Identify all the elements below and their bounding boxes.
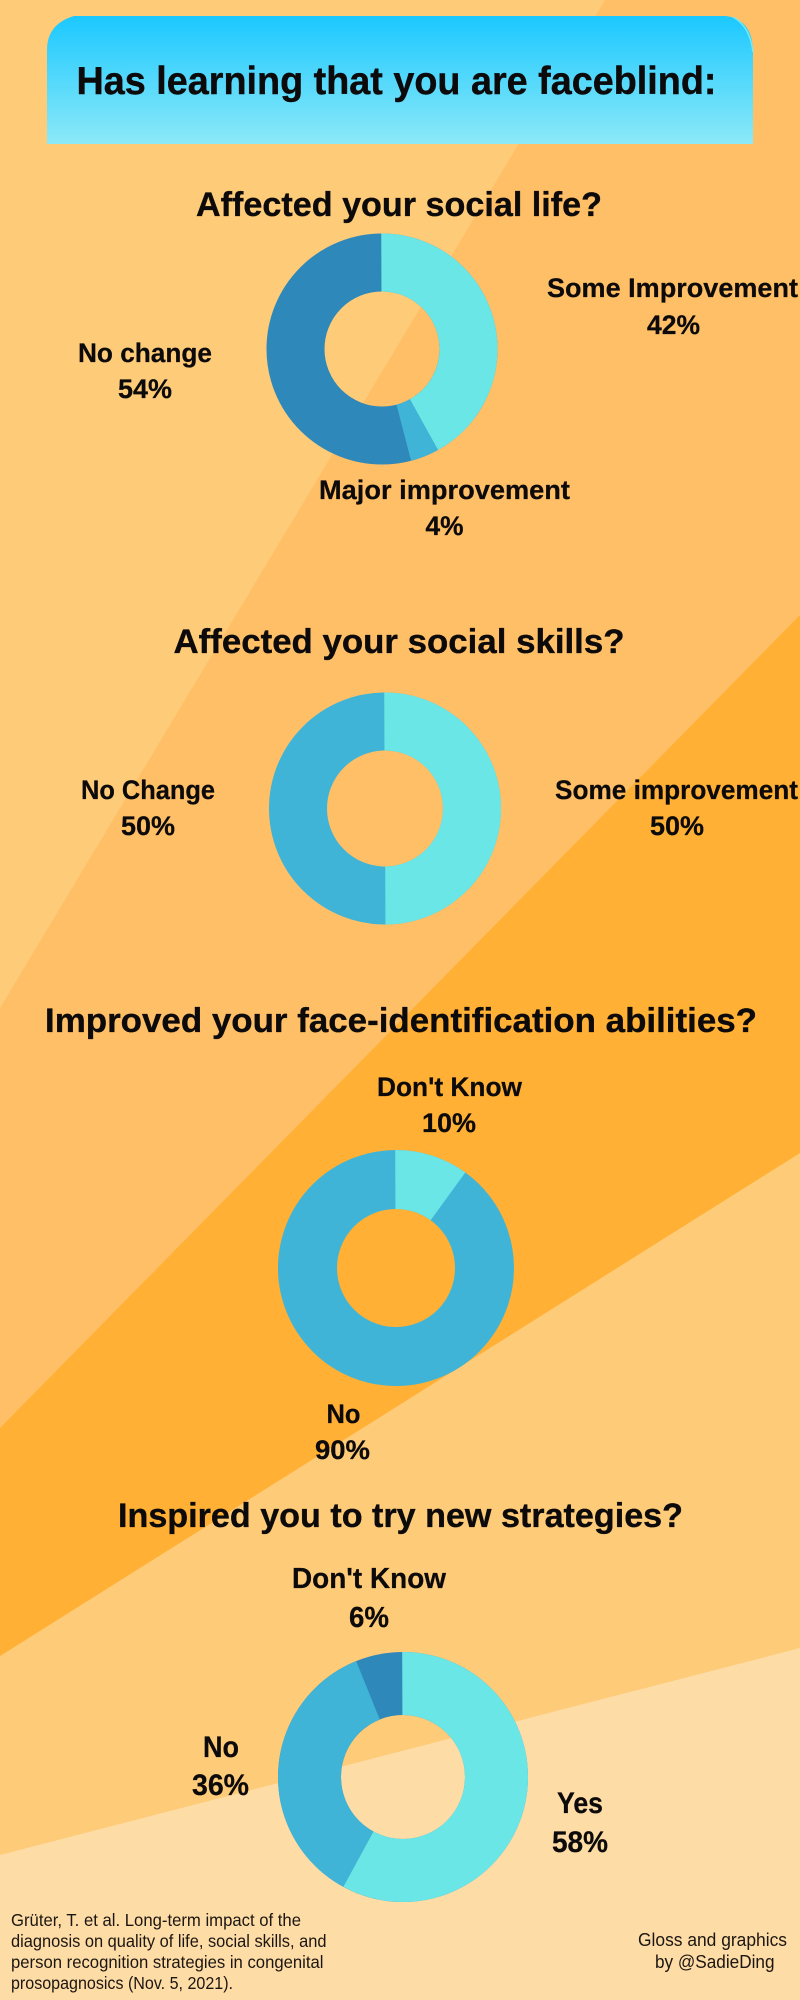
label: no 90%: [315, 1399, 370, 1465]
label: don't know 10%: 10%: [422, 1108, 476, 1138]
citation text: diagnosis on quality of life, social skills, and: [11, 1931, 326, 1951]
credit text: [638, 1929, 787, 1972]
citation text: person recognition strategies in congenital: [11, 1952, 324, 1972]
label: no change 54%: No change: [78, 338, 212, 368]
title text: Has learning that you are faceblind:: [76, 60, 716, 103]
label: some improvement 42%: Some Improvement: [547, 273, 798, 303]
label: don't know 6%: 6%: [349, 1602, 389, 1634]
label: no change 54%: 54%: [118, 374, 172, 404]
label: no change 50%: [81, 775, 215, 841]
label: no 36%: [192, 1731, 249, 1802]
label: no 36%: No: [203, 1731, 239, 1764]
label: yes 58%: Yes: [557, 1787, 603, 1820]
heading: face identification: Improved your face-identification abilities?: [45, 1002, 757, 1040]
label: major improvement 4%: Major improvement: [319, 475, 570, 505]
donut chart: new strategies: [310, 1684, 496, 1870]
heading: social skills: Affected your social skills?: [174, 623, 624, 661]
label: no change 50%: 50%: [121, 811, 175, 841]
heading: new strategies: Inspired you to try new strategies?: [118, 1497, 683, 1535]
label: don't know 10%: [377, 1072, 523, 1138]
label: no 90%: 90%: [315, 1435, 370, 1465]
label: major improvement 4%: [319, 475, 570, 541]
panel: social skills: [81, 623, 798, 896]
label: some improvement 50%: [555, 775, 798, 841]
panel: social life: [78, 186, 798, 541]
credit text: by @SadieDing: [655, 1951, 774, 1972]
label: no 90%: No: [326, 1399, 360, 1429]
panel: new strategies: [118, 1497, 683, 1870]
label: no change 54%: [78, 338, 212, 404]
label: don't know 6%: Don't Know: [292, 1563, 446, 1595]
label: major improvement 4%: 4%: [426, 511, 464, 541]
credit text: Gloss and graphics: [638, 1929, 787, 1950]
panel: face identification: [45, 1002, 757, 1465]
label: yes 58%: 58%: [552, 1826, 608, 1859]
label: no change 50%: No Change: [81, 775, 215, 805]
heading: social life: Affected your social life?: [196, 186, 602, 224]
label: some improvement 42%: 42%: [647, 310, 700, 340]
donut chart: social life: [296, 262, 468, 436]
donut chart: social skills: [298, 722, 472, 896]
citation text: prosopagnosics (Nov. 5, 2021).: [11, 1973, 233, 1993]
citation text: Grüter, T. et al. Long-term impact of the: [11, 1910, 301, 1930]
label: no 36%: 36%: [192, 1769, 249, 1802]
label: some improvement 50%: 50%: [650, 811, 704, 841]
title banner: [47, 16, 753, 144]
label: don't know 6%: [292, 1563, 446, 1634]
label: some improvement 42%: [547, 273, 798, 340]
donut chart: face identification: [308, 1180, 484, 1356]
label: don't know 10%: Don't Know: [377, 1072, 523, 1102]
citation text: [11, 1910, 326, 1993]
label: some improvement 50%: Some improvement: [555, 775, 798, 805]
label: yes 58%: [552, 1787, 608, 1859]
